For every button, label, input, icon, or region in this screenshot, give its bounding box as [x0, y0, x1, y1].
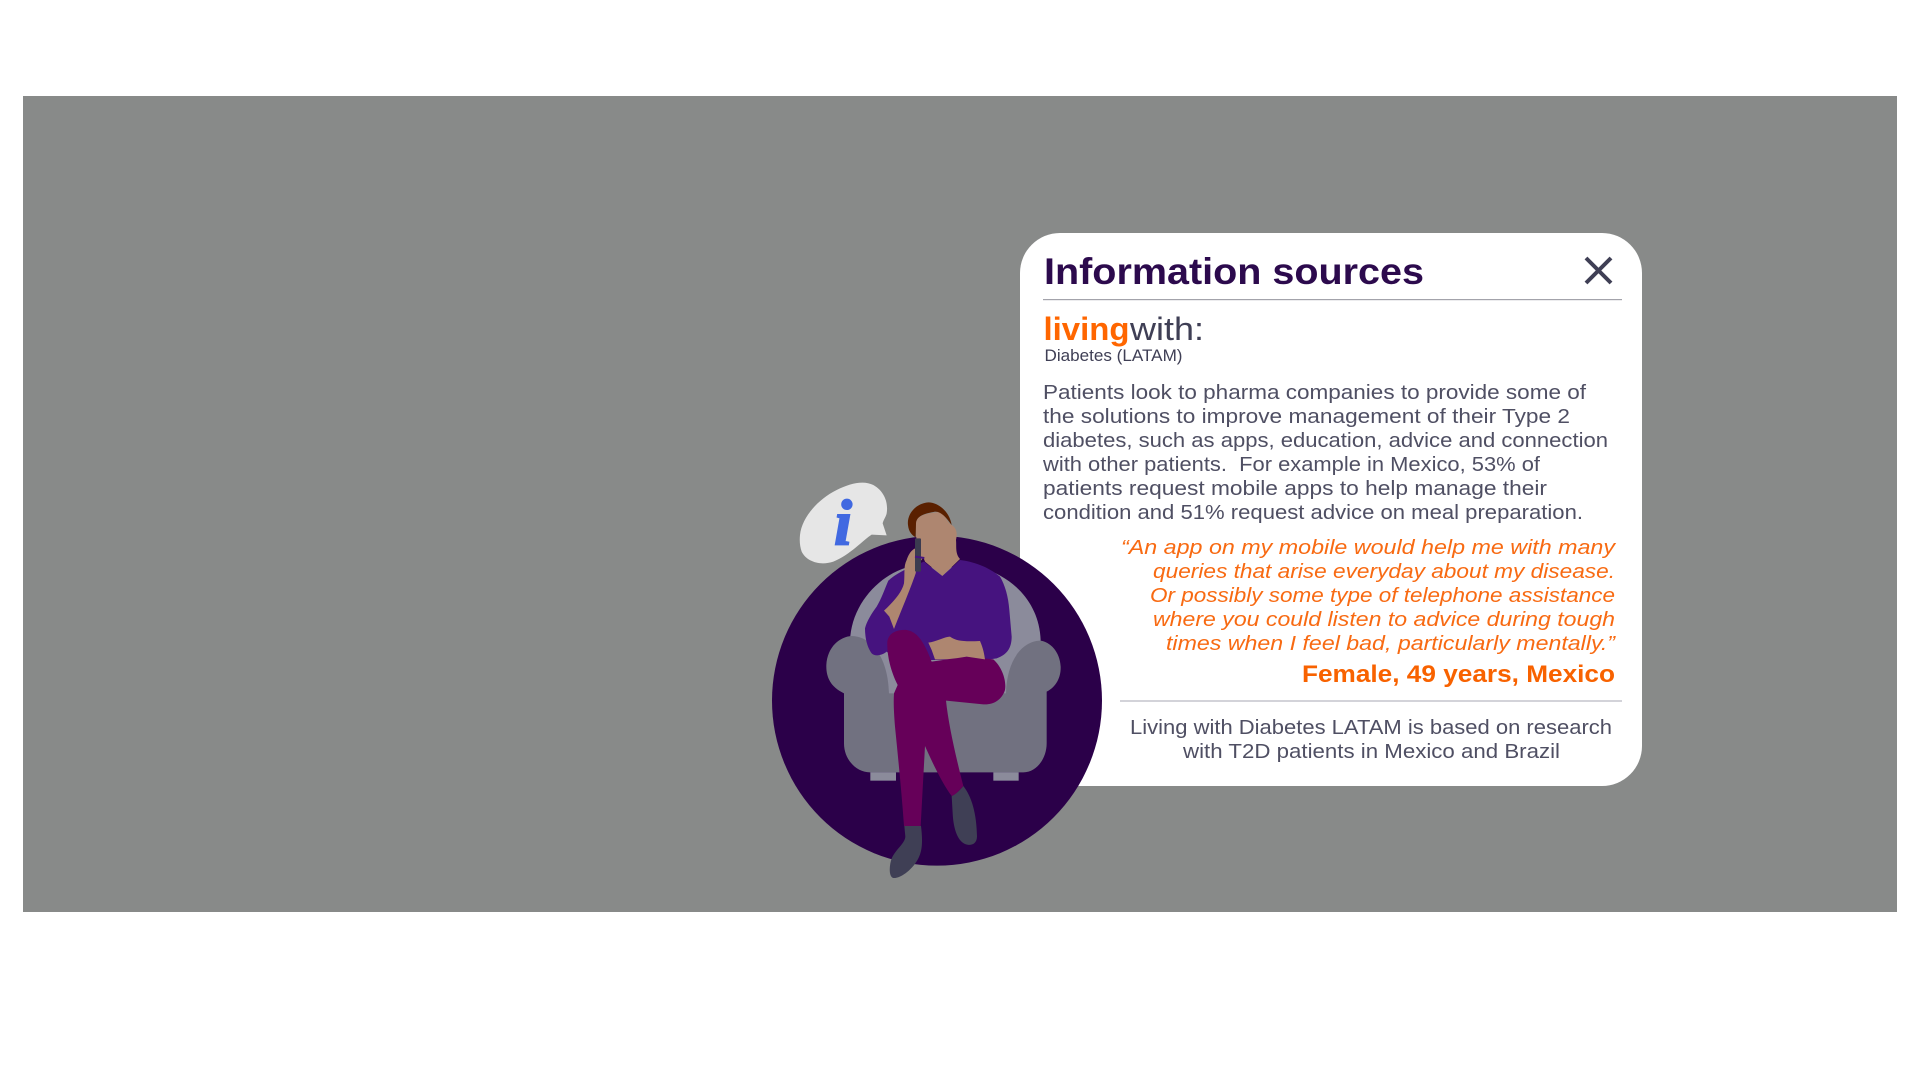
body text: Patients look to pharma companies to provide some of	[1043, 381, 1586, 404]
background circle	[772, 536, 1102, 866]
illustration: person on phone in armchair	[772, 483, 1102, 878]
body text: patients request mobile apps to help manage their	[1043, 477, 1547, 500]
heading: Information sources	[1044, 251, 1424, 292]
grey backdrop	[23, 96, 1897, 912]
patient quote	[1121, 536, 1617, 655]
panel: information sources card	[1020, 233, 1642, 786]
armchair	[826, 567, 1061, 781]
body text	[1042, 381, 1608, 524]
icon: close	[1586, 258, 1611, 283]
quote attribution: Female, 49 years, Mexico	[1302, 661, 1615, 688]
brand logotype	[1044, 311, 1204, 347]
patient quote: times when I feel bad, particularly mentally.”	[1166, 632, 1616, 655]
brand logotype: living	[1044, 311, 1130, 347]
body text: the solutions to improve management of their Type 2	[1043, 405, 1570, 428]
body text: condition and 51% request advice on meal preparation.	[1043, 501, 1583, 524]
icon: info speech bubble: i	[834, 488, 852, 560]
patient quote: “An app on my mobile would help me with many	[1121, 536, 1617, 559]
body text: diabetes, such as apps, education, advice and connection	[1043, 429, 1608, 452]
icon: info speech bubble	[800, 483, 887, 563]
research note	[1130, 716, 1612, 763]
person	[865, 502, 1012, 878]
brand logotype: with:	[1129, 311, 1204, 347]
research note: Living with Diabetes LATAM is based on research	[1130, 716, 1612, 739]
patient quote: queries that arise everyday about my disease.	[1153, 560, 1615, 583]
patient quote: where you could listen to advice during tough	[1153, 608, 1615, 631]
research note: with T2D patients in Mexico and Brazil	[1182, 740, 1560, 763]
patient quote: Or possibly some type of telephone assistance	[1150, 584, 1615, 607]
body text: with other patients. For example in Mexico, 53% of	[1042, 453, 1540, 476]
subtitle: Diabetes (LATAM)	[1044, 347, 1182, 365]
